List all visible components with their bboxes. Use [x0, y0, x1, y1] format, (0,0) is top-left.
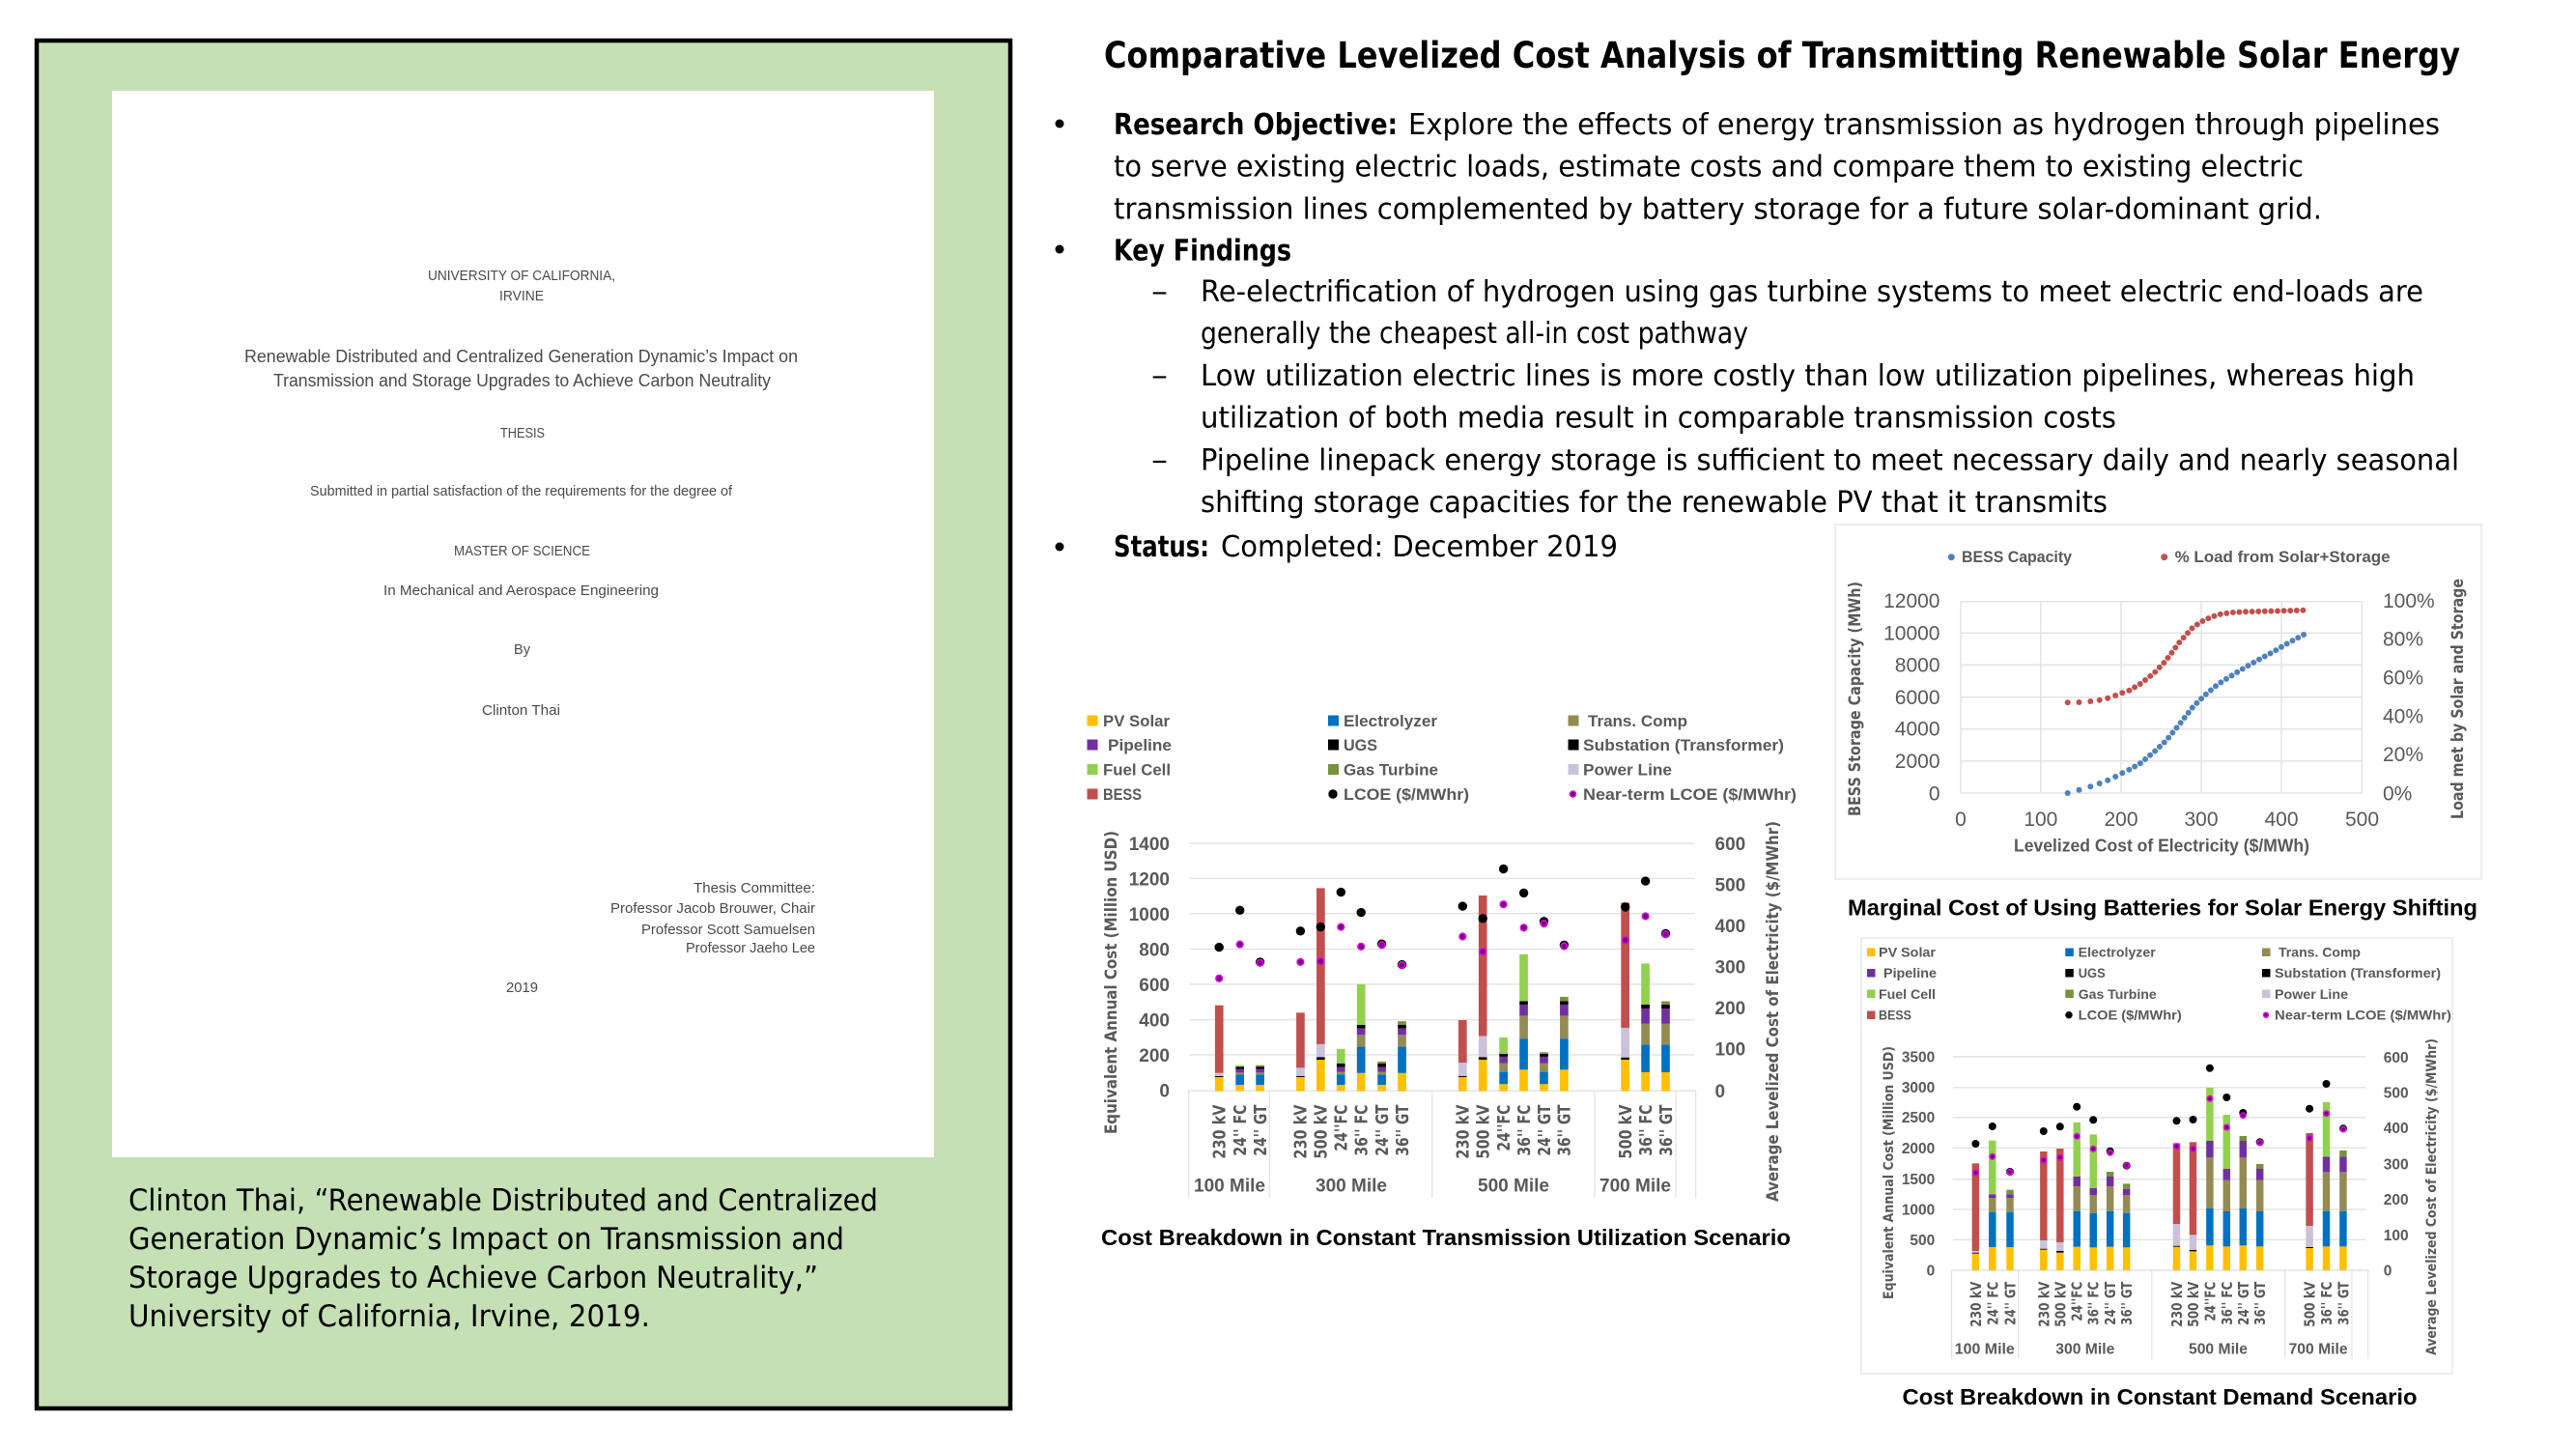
- chart: cost breakdown in constant demand scenario: [1861, 938, 2452, 1374]
- citation caption: Generation Dynamic’s Impact on Transmission and: [128, 1222, 844, 1257]
- thesis cover page: [112, 91, 934, 1157]
- category labels: 36'' FC: [1352, 1105, 1372, 1156]
- x axis ticks: 300: [2184, 809, 2219, 831]
- right axis ticks: 500: [1715, 876, 1745, 896]
- category labels: 36'' GT: [1656, 1104, 1677, 1156]
- category labels: 24'' GT: [1251, 1104, 1271, 1156]
- right axis ticks: 0: [1715, 1082, 1725, 1102]
- chart: cost breakdown in constant transmission utilization scenario: [1088, 712, 1797, 1202]
- text block: research objective, findings and status: transmission lines complemented by battery storage for a future solar-dominant grid.: [1114, 193, 2322, 226]
- right axis ticks: 400: [1715, 917, 1745, 937]
- right axis title: Average Levelized Cost of Electricity ($/MWhr): [1764, 821, 1783, 1202]
- legend: LCOE ($/MWhr): [2079, 1007, 2182, 1022]
- category labels: 36'' FC: [2318, 1282, 2335, 1325]
- thesis cover page: Submitted in partial satisfaction of the requirements for the degree of: [310, 483, 733, 499]
- LCOE markers: [1971, 1065, 2347, 1176]
- citation caption: Clinton Thai, “Renewable Distributed and Centralized: [128, 1183, 878, 1218]
- category labels: 36'' FC: [1636, 1105, 1656, 1156]
- category labels: 500 kV: [2302, 1281, 2319, 1327]
- text block: research objective, findings and status: shifting storage capacities for the renewable PV that it transmits: [1201, 486, 2108, 520]
- right axis ticks: 100%: [2383, 590, 2435, 612]
- distance group labels: 300 Mile: [1316, 1177, 1387, 1196]
- distance group labels: 100 Mile: [1955, 1342, 2015, 1358]
- legend: PV Solar: [1103, 712, 1170, 730]
- category labels: 36'' GT: [2335, 1281, 2353, 1325]
- text block: research objective, findings and status: generally the cheapest all-in cost pathway: [1201, 317, 1748, 351]
- left axis ticks: 600: [1139, 976, 1170, 996]
- right axis ticks: [2384, 1050, 2409, 1279]
- right axis ticks: 600: [2384, 1050, 2409, 1066]
- chart caption: constant transmission utilization: Cost Breakdown in Constant Transmission Utilization Scenario: [1101, 1225, 1791, 1250]
- category labels: 500 kV: [2185, 1281, 2202, 1327]
- x axis ticks: 200: [2104, 809, 2138, 831]
- text block: research objective, findings and status: [1055, 108, 2459, 564]
- left axis ticks: [1129, 835, 1170, 1102]
- category labels: 230 kV: [1291, 1105, 1312, 1159]
- right axis ticks: 40%: [2383, 705, 2423, 728]
- left axis ticks: 2000: [1902, 1141, 1935, 1157]
- legend: BESS Capacity: [1962, 548, 2073, 566]
- legend: [1948, 548, 2391, 566]
- left axis ticks: 500: [1910, 1233, 1935, 1249]
- right axis ticks: 300: [2384, 1157, 2409, 1173]
- legend: Electrolyzer: [2079, 945, 2156, 960]
- legend: Power Line: [2275, 986, 2348, 1002]
- legend: UGS: [2079, 965, 2106, 980]
- left axis ticks: 3500: [1902, 1049, 1935, 1066]
- distance group labels: [1955, 1342, 2348, 1358]
- x axis ticks: 0: [1955, 809, 1967, 831]
- thesis cover page: Transmission and Storage Upgrades to Achieve Carbon Neutrality: [273, 371, 771, 390]
- right axis ticks: 200: [1715, 999, 1745, 1019]
- text block: research objective, findings and status: utilization of both media result in comparable transmission costs: [1201, 402, 2116, 435]
- citation caption: University of California, Irvine, 2019.: [128, 1299, 650, 1334]
- left axis ticks: [1883, 590, 1939, 806]
- right axis ticks: 0%: [2383, 782, 2412, 806]
- stacked bars: [1215, 888, 1670, 1091]
- distance group labels: 100 Mile: [1194, 1177, 1265, 1196]
- left axis ticks: 0: [1929, 782, 1939, 806]
- category labels: 230 kV: [1454, 1105, 1474, 1159]
- category labels: 36'' FC: [2085, 1282, 2103, 1325]
- left axis ticks: 200: [1139, 1046, 1170, 1066]
- right axis ticks: 300: [1715, 958, 1745, 978]
- right axis ticks: 0: [2384, 1264, 2392, 1279]
- right axis ticks: 500: [2384, 1086, 2409, 1101]
- thesis cover page: 2019: [506, 980, 538, 996]
- legend: Trans. Comp: [2279, 945, 2361, 960]
- category labels: 24''FC: [2069, 1282, 2086, 1321]
- text block: research objective, findings and status: Status:: [1114, 530, 1209, 564]
- near-term LCOE markers: [1973, 1096, 2346, 1176]
- left axis ticks: 0: [1927, 1264, 1935, 1279]
- category labels: 24''FC: [2201, 1282, 2219, 1321]
- right axis ticks: 60%: [2383, 667, 2423, 690]
- x axis ticks: 500: [2345, 809, 2379, 831]
- category labels: [1967, 1281, 2353, 1327]
- thesis cover page: In Mechanical and Aerospace Engineering: [383, 582, 659, 599]
- thesis cover page: By: [514, 641, 530, 658]
- legend: BESS: [1879, 1007, 1911, 1022]
- right axis ticks: 100: [2384, 1228, 2409, 1244]
- right axis ticks: [1715, 835, 1745, 1102]
- left axis ticks: 1400: [1129, 835, 1170, 855]
- left axis title: Equivalent Annual Cost (Million USD): [1102, 831, 1121, 1134]
- left axis ticks: 2000: [1895, 751, 1939, 773]
- panel: thesis reference: [37, 41, 1010, 1408]
- right axis ticks: 80%: [2383, 628, 2423, 651]
- legend: Fuel Cell: [1103, 761, 1171, 779]
- text block: research objective, findings and status: Research Objective:: [1114, 108, 1398, 142]
- category labels: 24''FC: [1494, 1105, 1514, 1151]
- category labels: 230 kV: [2035, 1281, 2052, 1327]
- right axis title: Average Levelized Cost of Electricity ($/MWhr): [2424, 1038, 2440, 1355]
- thesis cover page: Professor Scott Samuelsen: [641, 922, 815, 938]
- category labels: 36'' GT: [1393, 1104, 1413, 1156]
- category labels: 230 kV: [2168, 1281, 2186, 1327]
- left axis ticks: [1902, 1049, 1935, 1279]
- distance group labels: 700 Mile: [1599, 1177, 1671, 1196]
- right axis ticks: 200: [2384, 1192, 2409, 1208]
- left axis ticks: 800: [1139, 941, 1170, 960]
- left axis title: Equivalent Annual Cost (Million USD): [1882, 1046, 1897, 1299]
- legend: Substation (Transformer): [1583, 736, 1784, 754]
- left axis ticks: 1200: [1129, 869, 1170, 890]
- legend: Fuel Cell: [1879, 986, 1936, 1002]
- category labels: 24'' GT: [1535, 1104, 1555, 1156]
- text block: research objective, findings and status: –: [1151, 359, 1168, 393]
- text block: research objective, findings and status: to serve existing electric loads, estimate costs and compare them to existing electric: [1114, 151, 2304, 184]
- category labels: 36'' FC: [1514, 1105, 1535, 1156]
- legend: BESS: [1103, 785, 1142, 804]
- text block: research objective, findings and status: –: [1151, 275, 1168, 309]
- text block: research objective, findings and status: Key Findings: [1114, 234, 1291, 269]
- text block: research objective, findings and status: –: [1151, 444, 1168, 477]
- legend: LCOE ($/MWhr): [1344, 785, 1469, 804]
- text block: research objective, findings and status: Low utilization electric lines is more costly than low utilization pipelines, whereas high: [1201, 359, 2415, 393]
- series: load from solar and storage: [2065, 611, 2307, 705]
- right axis ticks: 20%: [2383, 744, 2423, 766]
- legend: Near-term LCOE ($/MWhr): [2275, 1007, 2451, 1022]
- distance group labels: 300 Mile: [2055, 1342, 2114, 1358]
- category labels: 36'' GT: [1555, 1104, 1575, 1156]
- citation caption: [128, 1183, 878, 1334]
- thesis cover page: Professor Jacob Brouwer, Chair: [610, 900, 815, 917]
- right axis ticks: [2383, 590, 2435, 806]
- legend: Pipeline: [1108, 736, 1172, 754]
- text block: research objective, findings and status: Re-electrification of hydrogen using gas turbine systems to meet electric end-loads are: [1201, 275, 2423, 309]
- series: BESS capacity: [2065, 634, 2307, 796]
- thesis cover page: Renewable Distributed and Centralized Generation Dynamic’s Impact on: [244, 347, 798, 366]
- left axis ticks: 2500: [1902, 1110, 1935, 1126]
- text block: research objective, findings and status: Pipeline linepack energy storage is sufficient to meet necessary daily and nearly seasonal: [1201, 444, 2459, 477]
- category labels: 500 kV: [1616, 1105, 1636, 1159]
- legend: UGS: [1344, 736, 1377, 754]
- legend: Gas Turbine: [2079, 986, 2157, 1002]
- thesis cover page: Clinton Thai: [482, 702, 560, 719]
- right axis ticks: 400: [2384, 1121, 2409, 1137]
- left axis ticks: 0: [1159, 1082, 1170, 1102]
- panel background: [37, 41, 1010, 1408]
- category labels: 36'' GT: [2251, 1281, 2269, 1325]
- left axis ticks: 1500: [1902, 1172, 1935, 1188]
- category labels: 230 kV: [1967, 1281, 1985, 1327]
- legend: Trans. Comp: [1588, 712, 1687, 730]
- right axis ticks: 100: [1715, 1039, 1745, 1061]
- category labels: 500 kV: [1312, 1105, 1332, 1159]
- thesis cover page: Professor Jaeho Lee: [686, 940, 815, 956]
- category labels: 24'' GT: [2102, 1281, 2119, 1325]
- near-term LCOE markers: [1216, 901, 1669, 981]
- distance group labels: 500 Mile: [1478, 1177, 1549, 1196]
- left axis ticks: 8000: [1895, 655, 1939, 676]
- right axis title: Load met by Solar and Storage: [2449, 579, 2468, 819]
- left axis ticks: 4000: [1895, 719, 1939, 740]
- legend: Electrolyzer: [1344, 712, 1437, 730]
- legend: PV Solar: [1879, 945, 1937, 960]
- thesis cover page: THESIS: [500, 425, 545, 441]
- thesis cover page: MASTER OF SCIENCE: [454, 543, 590, 559]
- chart: marginal cost of using batteries: [1835, 525, 2481, 879]
- category labels: 500 kV: [1474, 1105, 1493, 1159]
- legend: Pipeline: [1883, 965, 1937, 980]
- left axis ticks: 10000: [1883, 622, 1939, 645]
- left axis ticks: 1000: [1129, 905, 1170, 925]
- category labels: 230 kV: [1209, 1105, 1231, 1159]
- x axis ticks: [1955, 809, 2379, 831]
- category labels: 24'' GT: [2235, 1281, 2252, 1325]
- distance group labels: [1194, 1177, 1671, 1196]
- x axis title: Levelized Cost of Electricity ($/MWh): [2014, 837, 2309, 856]
- legend: Gas Turbine: [1344, 761, 1438, 779]
- x axis ticks: 400: [2264, 809, 2299, 831]
- chart caption: constant demand: Cost Breakdown in Constant Demand Scenario: [1903, 1384, 2417, 1409]
- left axis ticks: 12000: [1883, 590, 1939, 612]
- legend: % Load from Solar+Storage: [2175, 548, 2391, 566]
- x axis ticks: 100: [2024, 809, 2057, 831]
- left axis ticks: 1000: [1902, 1202, 1935, 1219]
- LCOE markers: [1215, 865, 1670, 969]
- legend: Substation (Transformer): [2275, 965, 2441, 980]
- left axis ticks: 400: [1139, 1011, 1170, 1032]
- category labels: 24'' FC: [1231, 1105, 1251, 1156]
- category labels: 36'' FC: [2219, 1282, 2236, 1325]
- stacked bars: [1972, 1088, 2347, 1270]
- legend: [1088, 712, 1797, 804]
- category labels: 24'' GT: [1373, 1104, 1393, 1156]
- legend: Power Line: [1583, 761, 1672, 779]
- category labels: 24''FC: [1332, 1105, 1352, 1151]
- text block: research objective, findings and status: Explore the effects of energy transmission as hydrogen through pipelines: [1408, 108, 2440, 142]
- text block: research objective, findings and status: Completed: December 2019: [1221, 530, 1618, 564]
- legend: [1867, 945, 2451, 1022]
- left axis ticks: 6000: [1895, 687, 1939, 709]
- category labels: 24'' GT: [2001, 1281, 2019, 1325]
- citation caption: Storage Upgrades to Achieve Carbon Neutrality,”: [128, 1261, 818, 1295]
- left axis title: BESS Storage Capacity (MWh): [1846, 582, 1865, 816]
- right axis ticks: 600: [1715, 835, 1745, 855]
- category labels: 36'' GT: [2118, 1281, 2136, 1325]
- distance group labels: 700 Mile: [2289, 1342, 2348, 1358]
- category labels: 500 kV: [2052, 1281, 2069, 1327]
- chart caption: marginal cost: Marginal Cost of Using Batteries for Solar Energy Shifting: [1848, 895, 2477, 920]
- thesis cover page: UNIVERSITY OF CALIFORNIA,: [428, 268, 615, 284]
- distance group labels: 500 Mile: [2189, 1342, 2248, 1358]
- category labels: [1209, 1104, 1677, 1159]
- left axis ticks: 3000: [1902, 1080, 1935, 1096]
- legend: Near-term LCOE ($/MWhr): [1583, 785, 1797, 804]
- thesis cover page: Thesis Committee:: [694, 880, 815, 896]
- category labels: 24'' FC: [1984, 1282, 2001, 1325]
- thesis cover page: IRVINE: [499, 288, 544, 304]
